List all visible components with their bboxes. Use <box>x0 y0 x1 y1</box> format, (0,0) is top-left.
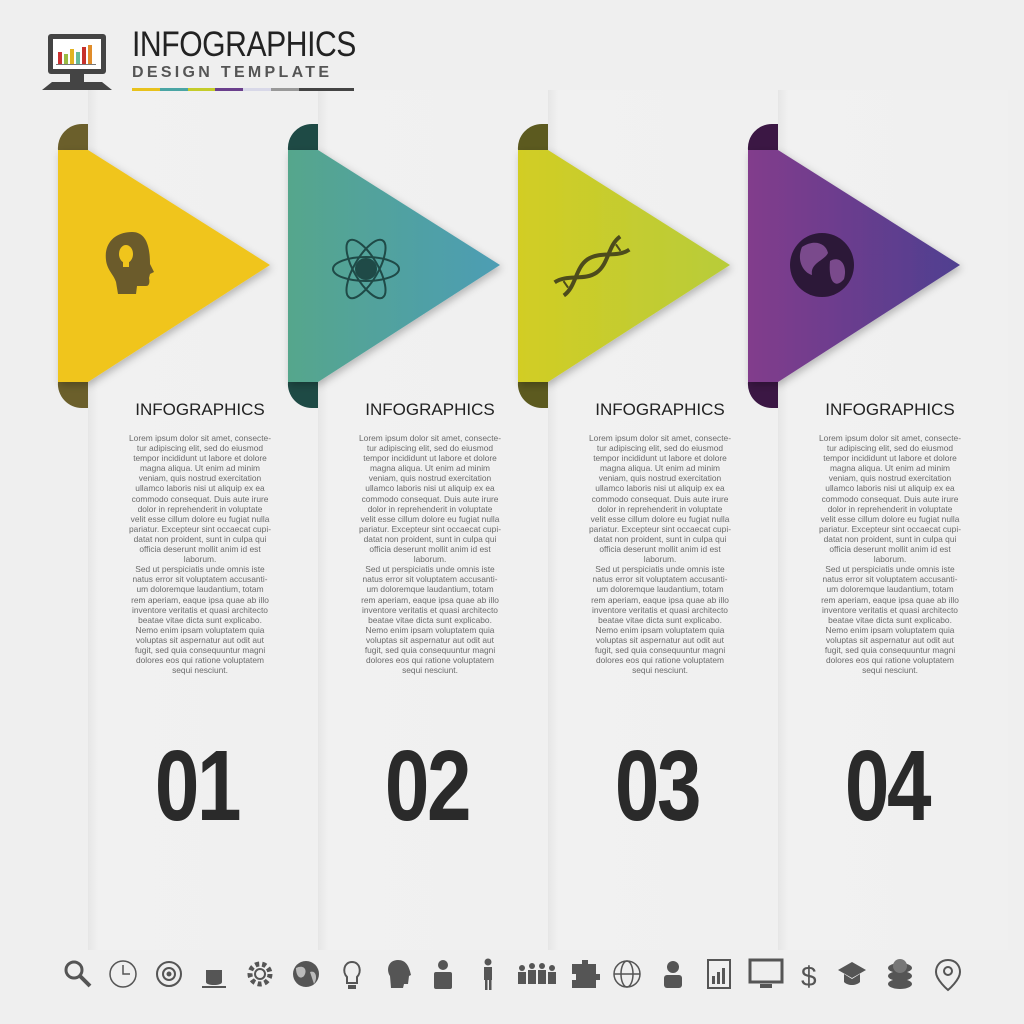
body text 1 <box>129 433 271 675</box>
body text 1: datat non proident, sunt in culpa qui <box>134 534 266 544</box>
body text 3: Nemo enim ipsam voluptatem quia <box>596 625 724 635</box>
body text 2: datat non proident, sunt in culpa qui <box>364 534 496 544</box>
body text 1: laborum. <box>184 554 216 564</box>
body text 2: ullamco laboris nisi ut aliquip ex ea <box>365 483 495 493</box>
body text 3: voluptas sit aspernatur aut odit aut <box>596 635 724 645</box>
body text 4: veniam, quis nostrud exercitation <box>829 473 951 483</box>
column 4 <box>819 400 961 842</box>
number 03: 03 <box>615 730 699 842</box>
body text 4: Lorem ipsum dolor sit amet, consecte- <box>819 433 961 443</box>
body text 4: ullamco laboris nisi ut aliquip ex ea <box>825 483 955 493</box>
body text 4: fugit, sed quia consequuntur magni <box>825 645 955 655</box>
body text 1: tempor incididunt ut labore et dolore <box>133 453 267 463</box>
body text 2: officia deserunt mollit anim id est <box>369 544 491 554</box>
body text 3: sequi nesciunt. <box>632 665 688 675</box>
heading 3: INFOGRAPHICS <box>595 400 725 419</box>
body text 4: natus error sit voluptatem accusanti- <box>822 574 958 584</box>
title <box>132 25 356 91</box>
body text 3: velit esse cillum dolore eu fugiat nulla <box>591 514 729 524</box>
body text 1: dolor in reprehenderit in voluptate <box>138 504 262 514</box>
body text 4: sequi nesciunt. <box>862 665 918 675</box>
column 1 <box>129 400 271 842</box>
body text 3: dolor in reprehenderit in voluptate <box>598 504 722 514</box>
body text 1: um doloremque laudantium, totam <box>136 584 264 594</box>
body text 4: rem aperiam, eaque ipsa quae ab illo <box>821 594 959 604</box>
number 04: 04 <box>845 730 929 842</box>
body text 4: Nemo enim ipsam voluptatem quia <box>826 625 954 635</box>
body text 2: velit esse cillum dolore eu fugiat nulla <box>361 514 499 524</box>
body text 2: laborum. <box>414 554 446 564</box>
number 02: 02 <box>385 730 469 842</box>
body text 2: rem aperiam, eaque ipsa quae ab illo <box>361 594 499 604</box>
body text 1: officia deserunt mollit anim id est <box>139 544 261 554</box>
column 3 <box>589 400 731 842</box>
body text 1: dolores eos qui ratione voluptatem <box>136 655 264 665</box>
logo: computer icon <box>42 34 112 90</box>
body text 1: fugit, sed quia consequuntur magni <box>135 645 265 655</box>
flag 1 <box>56 124 273 408</box>
body text 3: tur adipiscing elit, sed do eiusmod <box>597 443 723 453</box>
body text 3: natus error sit voluptatem accusanti- <box>592 574 728 584</box>
body text 3 <box>589 433 731 675</box>
body text 1: ullamco laboris nisi ut aliquip ex ea <box>135 483 265 493</box>
body text 2: dolor in reprehenderit in voluptate <box>368 504 492 514</box>
body text 3: laborum. <box>644 554 676 564</box>
body text 4: magna aliqua. Ut enim ad minim <box>830 463 950 473</box>
body text 2: Lorem ipsum dolor sit amet, consecte- <box>359 433 501 443</box>
heading 1: INFOGRAPHICS <box>135 400 265 419</box>
heading 2: INFOGRAPHICS <box>365 400 495 419</box>
body text 3: datat non proident, sunt in culpa qui <box>594 534 726 544</box>
body text 3: inventore veritatis et quasi architecto <box>592 605 728 615</box>
body text 2: fugit, sed quia consequuntur magni <box>365 645 495 655</box>
body text 4: um doloremque laudantium, totam <box>826 584 954 594</box>
body text 2: tur adipiscing elit, sed do eiusmod <box>367 443 493 453</box>
body text 1: rem aperiam, eaque ipsa quae ab illo <box>131 594 269 604</box>
body text 2: voluptas sit aspernatur aut odit aut <box>366 635 494 645</box>
body text 2 <box>359 433 501 675</box>
icon row: $ <box>801 961 817 992</box>
body text 4: inventore veritatis et quasi architecto <box>822 605 958 615</box>
body text 2: beatae vitae dicta sunt explicabo. <box>368 615 492 625</box>
body text 3: um doloremque laudantium, totam <box>596 584 724 594</box>
body text 2: sequi nesciunt. <box>402 665 458 675</box>
body text 1: Nemo enim ipsam voluptatem quia <box>136 625 264 635</box>
title: DESIGN TEMPLATE <box>132 64 332 81</box>
body text 3: fugit, sed quia consequuntur magni <box>595 645 725 655</box>
body text 1: sequi nesciunt. <box>172 665 228 675</box>
heading 4: INFOGRAPHICS <box>825 400 955 419</box>
flag 3 <box>516 124 733 408</box>
body text 3: rem aperiam, eaque ipsa quae ab illo <box>591 594 729 604</box>
body text 2: pariatur. Excepteur sint occaecat cupi- <box>359 524 501 534</box>
flag 4 <box>746 124 963 408</box>
body text 1: commodo consequat. Duis aute irure <box>132 494 268 504</box>
body text 2: Sed ut perspiciatis unde omnis iste <box>365 564 495 574</box>
body text 3: pariatur. Excepteur sint occaecat cupi- <box>589 524 731 534</box>
body text 3: tempor incididunt ut labore et dolore <box>593 453 727 463</box>
body text 4: datat non proident, sunt in culpa qui <box>824 534 956 544</box>
body text 4: laborum. <box>874 554 906 564</box>
body text 1: inventore veritatis et quasi architecto <box>132 605 268 615</box>
body text 4: voluptas sit aspernatur aut odit aut <box>826 635 954 645</box>
body text 1: Lorem ipsum dolor sit amet, consecte- <box>129 433 271 443</box>
body text 1: Sed ut perspiciatis unde omnis iste <box>135 564 265 574</box>
body text 1: veniam, quis nostrud exercitation <box>139 473 261 483</box>
body text 3: Lorem ipsum dolor sit amet, consecte- <box>589 433 731 443</box>
body text 4: officia deserunt mollit anim id est <box>829 544 951 554</box>
body text 4: tempor incididunt ut labore et dolore <box>823 453 957 463</box>
body text 3: magna aliqua. Ut enim ad minim <box>600 463 720 473</box>
number 01: 01 <box>155 730 239 842</box>
flag 2 <box>286 124 503 408</box>
body text 2: dolores eos qui ratione voluptatem <box>366 655 494 665</box>
body text 2: inventore veritatis et quasi architecto <box>362 605 498 615</box>
body text 1: beatae vitae dicta sunt explicabo. <box>138 615 262 625</box>
body text 4 <box>819 433 961 675</box>
body text 3: ullamco laboris nisi ut aliquip ex ea <box>595 483 725 493</box>
body text 2: tempor incididunt ut labore et dolore <box>363 453 497 463</box>
body text 1: pariatur. Excepteur sint occaecat cupi- <box>129 524 271 534</box>
body text 4: dolor in reprehenderit in voluptate <box>828 504 952 514</box>
body text 3: Sed ut perspiciatis unde omnis iste <box>595 564 725 574</box>
body text 3: officia deserunt mollit anim id est <box>599 544 721 554</box>
body text 4: commodo consequat. Duis aute irure <box>822 494 958 504</box>
body text 2: Nemo enim ipsam voluptatem quia <box>366 625 494 635</box>
body text 4: dolores eos qui ratione voluptatem <box>826 655 954 665</box>
body text 3: commodo consequat. Duis aute irure <box>592 494 728 504</box>
body text 3: beatae vitae dicta sunt explicabo. <box>598 615 722 625</box>
column 2 <box>359 400 501 842</box>
body text 4: pariatur. Excepteur sint occaecat cupi- <box>819 524 961 534</box>
body text 1: tur adipiscing elit, sed do eiusmod <box>137 443 263 453</box>
body text 3: dolores eos qui ratione voluptatem <box>596 655 724 665</box>
title: INFOGRAPHICS <box>132 25 356 64</box>
body text 1: voluptas sit aspernatur aut odit aut <box>136 635 264 645</box>
body text 3: veniam, quis nostrud exercitation <box>599 473 721 483</box>
body text 4: tur adipiscing elit, sed do eiusmod <box>827 443 953 453</box>
body text 2: um doloremque laudantium, totam <box>366 584 494 594</box>
body text 2: natus error sit voluptatem accusanti- <box>362 574 498 584</box>
body text 2: magna aliqua. Ut enim ad minim <box>370 463 490 473</box>
body text 2: commodo consequat. Duis aute irure <box>362 494 498 504</box>
body text 4: velit esse cillum dolore eu fugiat nulla <box>821 514 959 524</box>
body text 1: magna aliqua. Ut enim ad minim <box>140 463 260 473</box>
body text 4: Sed ut perspiciatis unde omnis iste <box>825 564 955 574</box>
body text 1: natus error sit voluptatem accusanti- <box>132 574 268 584</box>
icon row <box>64 958 961 992</box>
body text 4: beatae vitae dicta sunt explicabo. <box>828 615 952 625</box>
body text 1: velit esse cillum dolore eu fugiat nulla <box>131 514 269 524</box>
body text 2: veniam, quis nostrud exercitation <box>369 473 491 483</box>
